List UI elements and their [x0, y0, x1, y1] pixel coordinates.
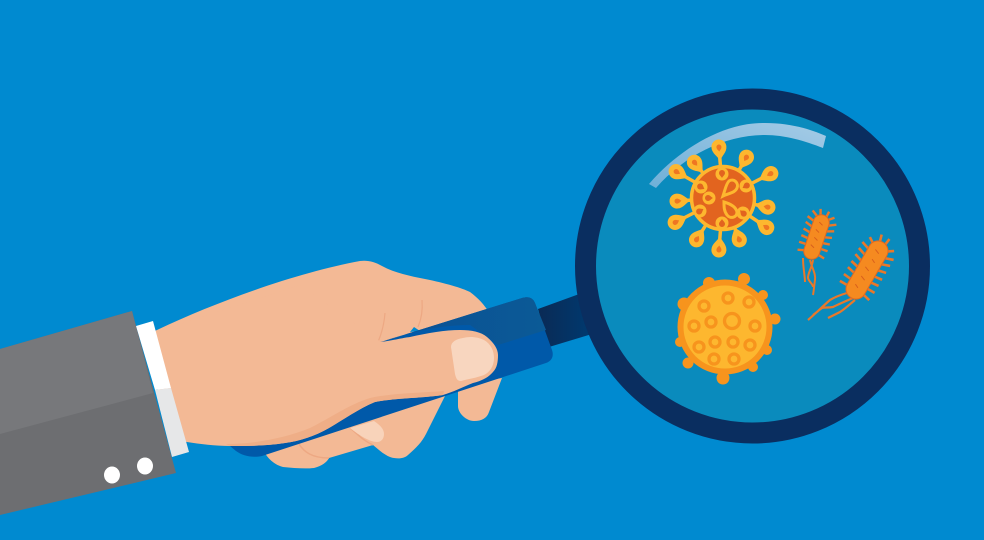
microbe: pollen spore	[675, 273, 780, 384]
cuff button	[137, 458, 153, 474]
palm shadow	[226, 391, 444, 446]
gap between fingers	[410, 327, 420, 332]
spore bumps	[675, 273, 780, 384]
body and hairs	[795, 206, 840, 264]
fingers behind the handle	[140, 261, 502, 468]
flagella	[803, 258, 815, 295]
sleeve highlight	[0, 311, 153, 434]
magnifying glass	[230, 99, 920, 457]
spore pores	[689, 293, 760, 364]
spikes	[676, 148, 770, 249]
sleeve	[0, 311, 189, 515]
surface spots	[691, 168, 755, 230]
hand and thumb	[140, 285, 498, 446]
large bacterium body	[835, 228, 902, 307]
microbe: small bacterium	[795, 206, 902, 320]
handle upper shade	[381, 297, 546, 345]
shaft	[538, 293, 592, 347]
flagella, second bacterium	[808, 293, 855, 320]
spike bulbs	[665, 139, 781, 258]
thumbnail	[451, 337, 494, 381]
handle	[230, 297, 553, 457]
finger details	[299, 300, 422, 458]
cuff button	[104, 466, 120, 484]
spore body	[680, 282, 770, 372]
shirt cuff	[136, 321, 189, 457]
virus body	[692, 166, 754, 230]
lens	[586, 99, 920, 433]
fingertip nail	[350, 421, 384, 442]
microbe: coronavirus	[665, 139, 781, 258]
lens glint	[649, 123, 826, 188]
